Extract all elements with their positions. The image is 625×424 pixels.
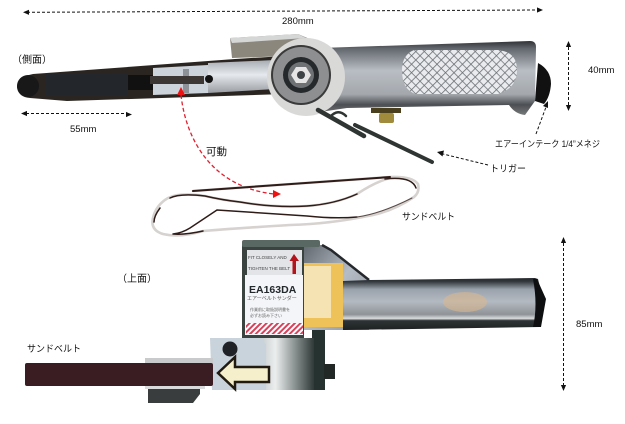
label: 40mm: 40mm xyxy=(588,65,614,76)
warning label: EA163DA xyxy=(249,284,297,296)
brass air fitting xyxy=(371,108,401,123)
neck of body xyxy=(300,245,369,330)
lower housing xyxy=(244,338,314,390)
trigger lever xyxy=(318,110,432,162)
warning label: 必ずお読み下さい xyxy=(250,312,282,318)
belt arm xyxy=(17,56,285,101)
knurled grip xyxy=(402,50,517,94)
label: air intake thread: エアーインテーク 1/4”メネジ xyxy=(495,139,600,149)
right column of housing xyxy=(312,330,325,390)
label: 280mm: 280mm xyxy=(282,16,314,27)
red dashed arrow: movable part xyxy=(177,87,281,198)
wheel housing ring xyxy=(267,38,345,116)
silver arm section xyxy=(208,60,275,93)
warning label: エアーベルトサンダー xyxy=(247,295,297,302)
wheel xyxy=(271,45,331,105)
rear air inlet cap xyxy=(535,63,551,104)
warning label xyxy=(245,250,303,335)
label: top view: （上面） xyxy=(117,273,157,285)
label: side view: （側面） xyxy=(12,53,52,66)
motor cylinder xyxy=(242,243,304,339)
label: sanding belt: サンドベルト xyxy=(402,212,455,223)
front plate xyxy=(210,338,266,390)
dimension arrow: 40mm xyxy=(566,41,571,111)
rear cap xyxy=(533,279,546,327)
warning label: TIGHTEN THE BELT xyxy=(248,266,290,271)
label: 85mm: 85mm xyxy=(576,319,602,330)
cover plate xyxy=(230,34,312,58)
black sanding pad xyxy=(45,74,128,96)
bracket lower xyxy=(148,385,200,403)
slider bar xyxy=(150,76,204,84)
label: trigger: トリガー xyxy=(490,164,526,175)
photo: top view of sander xyxy=(25,240,546,403)
side tab xyxy=(324,364,335,379)
label: 55mm: 55mm xyxy=(70,124,96,135)
nose roller xyxy=(17,75,39,97)
roller post xyxy=(183,69,189,93)
neck dark edge xyxy=(322,245,369,280)
photo: sanding belt loop xyxy=(152,177,418,235)
pad rod xyxy=(128,75,153,90)
direction arrow xyxy=(218,357,269,389)
dimension arrow: 85mm xyxy=(561,237,566,391)
warning label: FIT CLOSELY AND xyxy=(248,255,288,260)
top handle xyxy=(343,278,543,330)
bracket upper xyxy=(145,358,213,364)
label: sanding belt top view: サンドベルト xyxy=(27,344,81,355)
silver roller block xyxy=(153,65,208,95)
side handle xyxy=(320,41,536,115)
photo: side view of sander xyxy=(17,34,551,162)
dimension arrow: 280mm overall length xyxy=(23,7,543,15)
dimension arrow: 55mm xyxy=(21,111,132,117)
sanding belt strip xyxy=(25,363,213,386)
warning label: 作業前に取扱説明書を xyxy=(250,306,290,312)
arrow: air intake xyxy=(536,101,548,134)
label: movable: 可動 xyxy=(206,145,227,158)
yellow sticker xyxy=(303,263,343,327)
arrow: trigger xyxy=(437,150,488,165)
warm reflection on handle xyxy=(443,292,487,312)
bolt xyxy=(222,342,238,356)
